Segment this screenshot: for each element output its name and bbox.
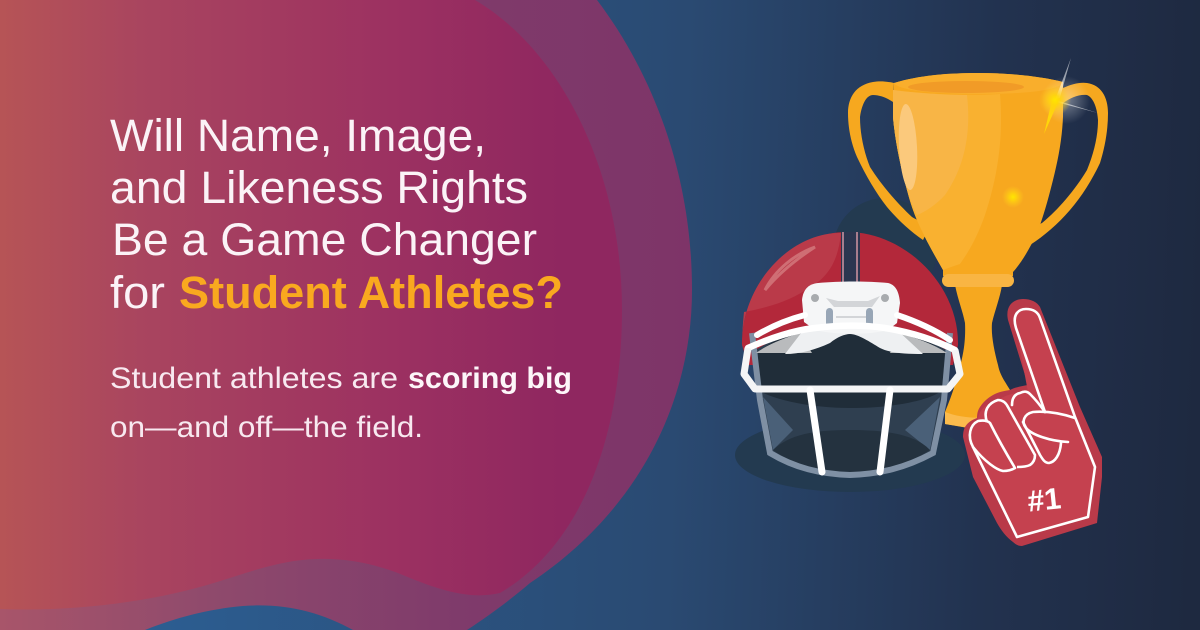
icon: football helmet <box>742 232 960 475</box>
subheading: on—and off—the field. <box>110 411 423 444</box>
heading: Be a Game Changer <box>112 214 537 265</box>
heading: Student Athletes? <box>179 267 563 318</box>
icon: helmet shadows <box>735 198 965 492</box>
icon: sparkles <box>1002 58 1098 208</box>
subheading: Student athletes are <box>110 362 398 395</box>
inner blob <box>0 0 622 609</box>
heading: Will Name, Image, <box>110 110 486 161</box>
outer blob <box>0 0 692 630</box>
heading: for <box>110 267 165 318</box>
label: #1: #1 <box>1026 482 1063 519</box>
heading <box>110 110 563 318</box>
icon: foam finger <box>963 299 1102 546</box>
heading: and Likeness Rights <box>110 162 528 213</box>
subheading <box>110 362 572 444</box>
subheading: scoring big <box>408 362 572 395</box>
icon: trophy <box>848 73 1108 428</box>
